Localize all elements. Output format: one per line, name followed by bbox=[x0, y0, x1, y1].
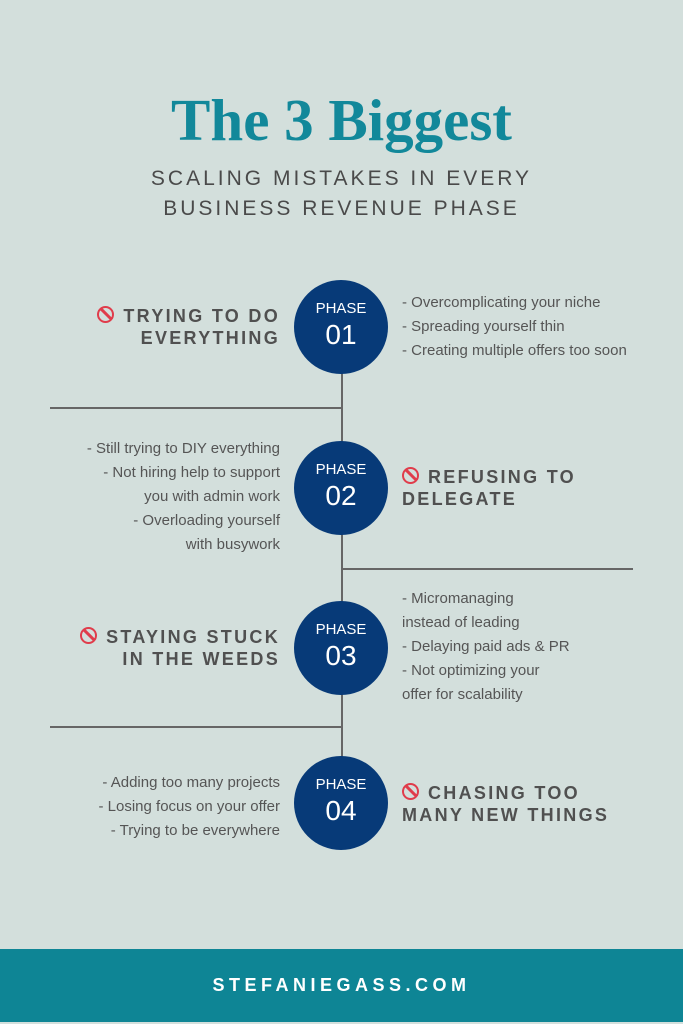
phase 4 bullets bbox=[98, 774, 280, 839]
phase 4 heading: MANY NEW THINGS bbox=[402, 805, 609, 825]
phase 2 bullets: - Still trying to DIY everything bbox=[87, 440, 280, 457]
footer: STEFANIEGASS.COM bbox=[212, 975, 471, 995]
footer bbox=[0, 949, 683, 1022]
phase 4 circle: 04 bbox=[325, 795, 357, 826]
phase 3 bullets: - Micromanaging bbox=[402, 590, 514, 607]
phase 1 bullets: - Overcomplicating your niche bbox=[402, 294, 600, 311]
phase 4 circle: PHASE bbox=[316, 776, 366, 793]
phase 1 heading bbox=[97, 306, 280, 348]
phase 3 heading: IN THE WEEDS bbox=[122, 649, 280, 669]
phase 1 circle: PHASE bbox=[316, 300, 366, 317]
phase 2 bullets bbox=[87, 440, 280, 553]
phase 3 bullets: instead of leading bbox=[402, 614, 520, 631]
phase 2 bullets: - Not hiring help to support bbox=[103, 464, 280, 481]
phase 1 bullets bbox=[402, 294, 627, 359]
phase 2 bullets: with busywork bbox=[186, 536, 280, 553]
phase 3 heading bbox=[80, 627, 280, 669]
phase 2 bullets: you with admin work bbox=[144, 488, 280, 505]
phase 3 circle bbox=[294, 601, 388, 695]
phase 1 heading: TRYING TO DO bbox=[123, 306, 280, 326]
phase 2 heading bbox=[402, 467, 576, 509]
phase 2 bullets: - Overloading yourself bbox=[133, 512, 280, 529]
phase 1 circle bbox=[294, 280, 388, 374]
phase 2 heading: DELEGATE bbox=[402, 489, 517, 509]
phase 4 heading: CHASING TOO bbox=[428, 783, 580, 803]
phase 4 circle bbox=[294, 756, 388, 850]
phase 1 bullets: - Spreading yourself thin bbox=[402, 318, 565, 335]
phase 3 circle: PHASE bbox=[316, 621, 366, 638]
phase 3 bullets: offer for scalability bbox=[402, 686, 523, 703]
phase 4 bullets: - Trying to be everywhere bbox=[111, 822, 280, 839]
phase 2 circle: 02 bbox=[325, 480, 357, 511]
subtitle bbox=[151, 167, 532, 220]
phase 3 bullets bbox=[402, 590, 570, 703]
phase 1 bullets: - Creating multiple offers too soon bbox=[402, 342, 627, 359]
phase 4 bullets: - Adding too many projects bbox=[102, 774, 280, 791]
title: The 3 Biggest bbox=[171, 87, 512, 153]
phase 4 bullets: - Losing focus on your offer bbox=[98, 798, 280, 815]
subtitle: BUSINESS REVENUE PHASE bbox=[163, 197, 520, 220]
phase 3 bullets: - Not optimizing your bbox=[402, 662, 540, 679]
phase 3 heading: STAYING STUCK bbox=[106, 627, 280, 647]
phase 1 circle: 01 bbox=[325, 319, 357, 350]
phase 3 bullets: - Delaying paid ads & PR bbox=[402, 638, 570, 655]
phase 2 circle: PHASE bbox=[316, 461, 366, 478]
phase 2 circle bbox=[294, 441, 388, 535]
phase 3 circle: 03 bbox=[325, 640, 357, 671]
phase 2 heading: REFUSING TO bbox=[428, 467, 576, 487]
phase 4 heading bbox=[402, 783, 609, 825]
subtitle: SCALING MISTAKES IN EVERY bbox=[151, 167, 532, 190]
phase 1 heading: EVERYTHING bbox=[141, 328, 280, 348]
